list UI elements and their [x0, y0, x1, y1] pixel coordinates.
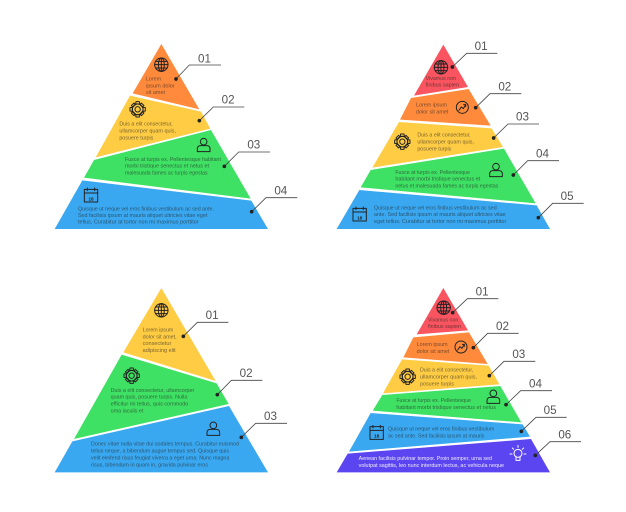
level 03 yellow: ullamcorper quam quis, — [417, 140, 474, 146]
level 05 blue: 18 — [374, 434, 380, 439]
level 05 blue: 18 — [357, 215, 363, 220]
callout 03 — [222, 139, 270, 168]
callout 04: 04 — [529, 377, 542, 390]
level 04 green: habitant morbi tristique senectus et netus — [396, 405, 496, 411]
level 03 green: morbi tristique senectus et netus et — [125, 164, 210, 170]
level 04 blue: tellus. Curabitur at tortor non mi maximus porttitor — [78, 220, 199, 226]
level 02 orange: Lorem ipsum — [416, 102, 448, 108]
level 02 green: quam quis, posuere turpis. Nulla — [111, 395, 187, 401]
callout 05: 05 — [544, 404, 557, 417]
level 02 green — [74, 355, 229, 439]
level 01 orange: ipsum dolor — [146, 83, 175, 89]
level 01 red — [417, 288, 468, 334]
callout 04 — [250, 184, 297, 213]
level 01 orange: Lorem — [146, 76, 162, 82]
level 02 yellow — [96, 96, 210, 157]
level 06 purple: volutpat sagittis, leo nunc interdum lectus, ac vehicula neque — [359, 463, 504, 469]
level 02 orange: dolor sit amet — [417, 349, 450, 355]
callout 03: 03 — [516, 111, 529, 124]
level 01 orange: sit amet — [146, 90, 166, 96]
level 04 blue: 18 — [89, 196, 94, 201]
callout 03 — [487, 348, 535, 377]
icon: light bulb — [510, 445, 526, 460]
callout 02: 02 — [498, 80, 511, 93]
level 02 green: urna iaculis et — [111, 408, 144, 414]
pyramid 2: five levels — [337, 40, 584, 229]
pyramid 3: three levels — [55, 288, 287, 472]
callout 01: 01 — [198, 52, 211, 65]
callout 01 — [181, 309, 228, 338]
level 04 green: Fusce at turpis ex. Pellentesque — [396, 398, 471, 404]
level 01 red: Vivamus non — [426, 76, 456, 82]
callout 01 — [450, 40, 497, 69]
callout 02 — [197, 94, 244, 122]
callout 04 — [511, 147, 559, 177]
pyramid 4: six levels — [337, 285, 581, 472]
callout 01 — [174, 52, 221, 81]
callout 04: 04 — [274, 184, 288, 197]
level 05 blue: Quisque ut neque vel eros finibus vestibulum ac sed — [374, 205, 497, 211]
callout 05: 05 — [561, 190, 574, 203]
level 01 yellow: Lorem ipsum — [143, 327, 174, 333]
callout 03 — [239, 410, 287, 439]
callout 04 — [504, 377, 552, 406]
callout 01 — [451, 285, 498, 314]
level 05 blue — [337, 190, 550, 229]
level 02 green: efficitur mi tellus, quis commodo — [111, 402, 188, 408]
level 01 yellow — [123, 288, 216, 381]
callout 05 — [519, 404, 567, 433]
level 03 blue: Donec vitae nulla vitae dui sodales tempus. Curabitur euismod — [91, 442, 239, 448]
callout 03: 03 — [264, 410, 277, 423]
level 01 yellow: adipiscing elit — [143, 348, 176, 354]
level 03 yellow: posuere turpis — [420, 381, 454, 387]
pyramid 1: four levels — [55, 44, 297, 229]
level 01 red: finibus sapien — [426, 83, 459, 89]
level 05 blue — [349, 413, 530, 452]
level 02 orange: Lorem ipsum — [417, 342, 448, 348]
level 04 green: habitant morbi tristique senectus et — [395, 177, 481, 183]
level 04 green: Fusce at turpis ex. Pellentesque — [395, 170, 470, 176]
level 03 yellow — [383, 359, 499, 393]
level 03 green: malesuada fames ac turpis egestas — [125, 171, 208, 177]
level 02 orange — [403, 332, 488, 364]
level 05 blue: Quisque ut neque vel eros finibus vestibulum — [388, 426, 495, 432]
level 03 blue: tellus neque, a bibendum augue tempus sed. Quisque quis — [91, 449, 229, 455]
level 04 green: netus et malesuada fames ac turpis egestas — [395, 184, 499, 190]
level 05 blue: ac sed ante. Sed facilisis ipsum at mauris — [388, 433, 485, 439]
level 03 blue — [55, 406, 268, 472]
level 05 blue: ante. Sed facilisis ipsum at mauris aliquet ultricies vitae — [374, 212, 506, 218]
callout 01: 01 — [475, 40, 488, 53]
level 04 green — [361, 149, 536, 203]
level 03 green — [84, 130, 251, 199]
level 01 yellow: dolor sit amet, — [143, 334, 177, 340]
callout 06: 06 — [558, 428, 571, 441]
level 06 purple: Aenean facilisis pulvinar tempor. Proin semper, urna sed — [359, 456, 492, 462]
callout 02: 02 — [496, 320, 509, 333]
level 03 yellow: Duis a elit consectetur, — [417, 133, 471, 139]
callout 03: 03 — [247, 139, 260, 152]
level 03 blue: risus, bibendum in quam in, gravida pulvinar eros — [91, 462, 208, 468]
level 02 yellow: Duis a elit consectetur, — [119, 122, 173, 128]
callout 01: 01 — [206, 309, 219, 322]
callout 02: 02 — [240, 367, 253, 380]
level 03 yellow: ullamcorper quam quis, — [420, 374, 477, 380]
level 03 blue: velit eleifend risus feugiat viverra a eget urna. Nunc magna — [91, 456, 229, 462]
callout 01: 01 — [476, 285, 489, 298]
callout 06 — [533, 428, 581, 457]
level 03 yellow: Duis a elit consectetur, — [420, 368, 473, 374]
callout 05 — [536, 190, 584, 219]
level 05 blue: eget tellus. Curabitur at tortor non mi maximus porttitor — [374, 219, 507, 225]
level 04 blue: Quisque ut neque vel eros finibus vestibulum ac sed ante. — [78, 206, 214, 212]
level 02 yellow: ullamcorper quam quis, — [119, 128, 176, 134]
level 01 red: Vivamus non — [428, 317, 458, 323]
callout 02 — [215, 367, 262, 396]
level 02 orange: dolor sit amet — [416, 109, 449, 115]
callout 03 — [492, 111, 539, 140]
level 03 yellow: posuere turpis — [417, 146, 452, 152]
level 04 blue: Sed facilisis ipsum at mauris aliquet ultricies vitae eget — [78, 213, 208, 219]
level 01 red — [414, 45, 468, 96]
level 02 green: Duis a elit consectetur, ullamcorper — [111, 388, 195, 394]
callout 02 — [471, 320, 519, 349]
level 01 yellow: consectetur — [143, 341, 172, 347]
level 03 yellow — [372, 122, 503, 168]
level 03 green: Fusce at turpis ex. Pellentesque habitant — [125, 157, 222, 163]
level 02 orange — [400, 89, 491, 126]
level 01 orange — [133, 44, 199, 109]
level 04 green — [373, 386, 521, 422]
level 02 yellow: posuere turpis — [119, 136, 154, 142]
callout 03: 03 — [512, 348, 525, 361]
callout 02 — [474, 80, 521, 109]
callout 02: 02 — [222, 94, 235, 107]
level 06 purple — [337, 439, 550, 472]
level 04 blue — [55, 180, 268, 229]
level 01 red: finibus sapien — [428, 324, 461, 330]
callout 04: 04 — [536, 147, 549, 160]
